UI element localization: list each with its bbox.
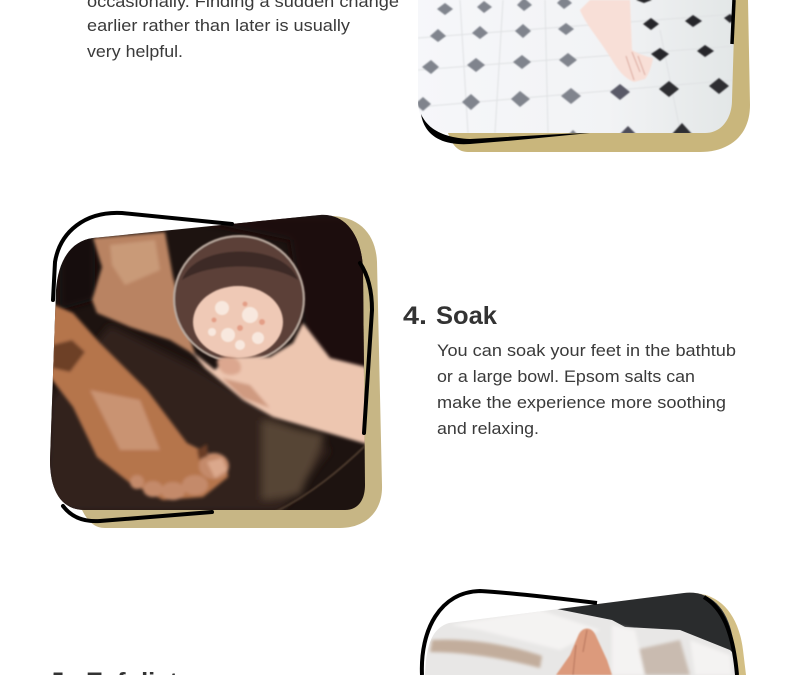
text: step 3 body xyxy=(87,0,399,61)
image: foot on tiled floor xyxy=(410,0,750,152)
outline: black hand-drawn frame xyxy=(53,213,372,521)
image: foot in white towel xyxy=(420,585,746,675)
heading: step 4: 4. xyxy=(403,302,427,330)
panel: step 4 soak xyxy=(40,205,736,528)
heading: step 4: Soak xyxy=(436,302,497,330)
outline: black hand-drawn frame xyxy=(422,591,737,675)
bowl xyxy=(174,236,304,362)
text: step 3 body: very helpful. xyxy=(87,43,183,61)
text: step 3 body: earlier rather than later is usually xyxy=(87,17,351,35)
image backing: gold shape xyxy=(82,216,382,528)
text: step 4 body xyxy=(437,342,736,438)
image: hand offering bowl of salts over feet xyxy=(40,205,382,528)
panel: step 5 exfoliate xyxy=(52,585,746,675)
heading: step 4 xyxy=(403,302,497,330)
text: step 4 body: You can soak your feet in the bathtub xyxy=(437,342,736,360)
text: step 4 body: make the experience more soothing xyxy=(437,394,726,412)
text: step 4 body: or a large bowl. Epsom salts can xyxy=(437,368,695,386)
panel: step 3 continued xyxy=(87,0,750,152)
text: step 4 body: and relaxing. xyxy=(437,420,539,438)
